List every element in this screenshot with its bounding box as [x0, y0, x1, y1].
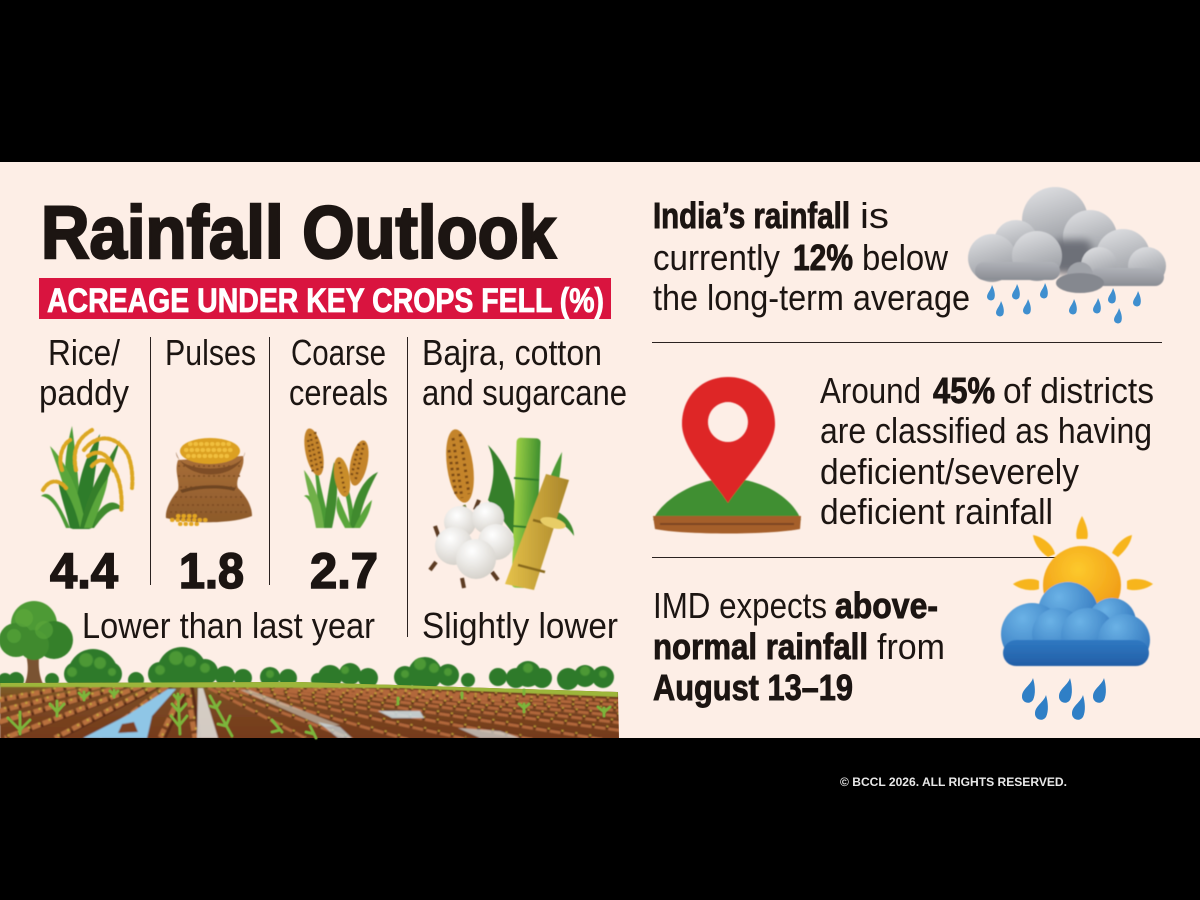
caption: slightly lower: Slightly lower [422, 605, 618, 646]
text block: IMD forecast [653, 585, 945, 708]
text block: deficient districts: Around [820, 370, 921, 411]
text block: rainfall below average: the long-term average [653, 277, 970, 318]
text block: rainfall below average: 12% [793, 237, 853, 278]
label: bajra, cotton and sugarcane [422, 332, 627, 413]
text block: deficient districts: of districts [1003, 370, 1154, 411]
column dividers [150, 337, 408, 637]
bushes [0, 647, 614, 699]
title: Rainfall Outlook [41, 191, 557, 274]
icon: location pin on green base [653, 377, 801, 534]
tree [0, 601, 73, 686]
label: rice/paddy: Rice/ [48, 332, 120, 373]
label: rice/paddy [39, 332, 129, 413]
icon: sack of pulses [166, 438, 252, 524]
icon: grey rain cloud [968, 187, 1166, 323]
icon: rice plant [41, 426, 132, 529]
text block: rainfall below average: currently [653, 237, 780, 278]
text block: IMD forecast: normal rainfall [653, 626, 868, 667]
text block: IMD forecast: IMD expects [653, 585, 827, 626]
illustration: farm field [0, 601, 643, 740]
caption: lower than last year: Lower than last year [82, 605, 375, 646]
text block: rainfall below average [653, 195, 970, 318]
icon: sun behind blue cloud with rain [1001, 516, 1153, 720]
copyright: © BCCL 2026. ALL RIGHTS RESERVED. [840, 777, 1067, 789]
value: pulses 1.8: 1.8 [179, 543, 244, 599]
rain drops [987, 283, 1141, 323]
subtitle banner: ACREAGE UNDER KEY CROPS FELL (%) [47, 282, 604, 320]
label: coarse cereals [289, 332, 388, 413]
rain drops [1022, 678, 1106, 720]
background panel [0, 162, 1200, 738]
label: coarse cereals: Coarse [291, 332, 386, 373]
value: rice 4.4: 4.4 [50, 543, 118, 599]
text block: rainfall below average: below [862, 237, 949, 278]
text block: rainfall below average: India’s rainfall [653, 195, 850, 236]
text block: IMD forecast: above- [835, 585, 938, 626]
icon: bajra, cotton and sugarcane [430, 428, 574, 590]
text block: rainfall below average: is [860, 195, 889, 236]
text block: deficient districts: deficient/severely [820, 451, 1079, 492]
text block: deficient districts: deficient rainfall [820, 491, 1053, 532]
text block: deficient districts: are classified as having [820, 410, 1152, 451]
text block: deficient districts: 45% [933, 370, 995, 411]
irrigation water [83, 689, 176, 738]
icon: coarse cereals [301, 427, 378, 528]
soil and crop rows [0, 682, 619, 738]
label: coarse cereals: cereals [289, 372, 388, 413]
divider 1 [652, 342, 1162, 344]
label: pulses: Pulses [165, 332, 256, 373]
text block: deficient districts [820, 370, 1154, 532]
label: bajra, cotton and sugarcane: and sugarcane [422, 372, 627, 413]
horizon grass [0, 681, 618, 697]
divider 2 [652, 556, 1056, 558]
value: coarse cereals 2.7: 2.7 [310, 543, 378, 599]
seedlings [8, 690, 610, 738]
label: bajra, cotton and sugarcane: Bajra, cotton [422, 332, 602, 373]
text block: IMD forecast: from [877, 626, 945, 667]
label: rice/paddy: paddy [39, 372, 129, 413]
text block: IMD forecast: August 13–19 [653, 667, 853, 708]
